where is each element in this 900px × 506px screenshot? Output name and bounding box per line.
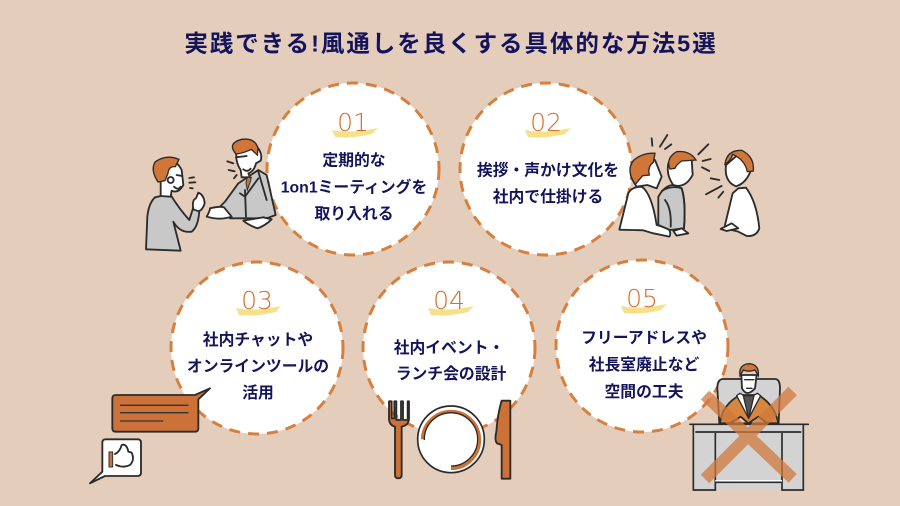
knife bbox=[495, 401, 510, 479]
highlight 04 bbox=[428, 306, 474, 316]
text 01: 取り入れる bbox=[314, 205, 394, 223]
text 04 bbox=[394, 339, 506, 383]
plate bbox=[418, 406, 484, 473]
fork bbox=[389, 401, 409, 478]
chat bubble bbox=[112, 388, 210, 432]
panel: method 02 bbox=[460, 83, 632, 255]
illustration: two businessmen talking bbox=[146, 139, 276, 251]
number 01: 01 bbox=[337, 108, 369, 137]
number 03: 03 bbox=[241, 286, 273, 315]
highlight 03 bbox=[236, 306, 281, 316]
highlight 01 bbox=[332, 128, 378, 138]
text 03: 活用 bbox=[242, 384, 274, 402]
highlight 02 bbox=[525, 128, 571, 138]
number 05: 05 bbox=[626, 284, 658, 313]
number 04: 04 bbox=[433, 286, 465, 315]
cross mark bbox=[705, 391, 793, 479]
text 01: 定期的な bbox=[322, 152, 386, 170]
left person bbox=[619, 153, 670, 237]
desk bbox=[690, 424, 808, 490]
right man bbox=[207, 139, 276, 228]
illustration: chat bubbles bbox=[90, 388, 210, 483]
text 05 bbox=[581, 329, 707, 401]
panel: method 05 bbox=[556, 260, 728, 432]
illustration: president at desk crossed out bbox=[690, 364, 808, 490]
title: 実践できる!風通しを良くする具体的な方法5選 bbox=[184, 30, 718, 56]
text 05: フリーアドレスや bbox=[581, 329, 707, 347]
text 04: 社内イベント・ bbox=[394, 339, 504, 357]
number 02: 02 bbox=[530, 108, 562, 137]
text 01: 1on1ミーティングを bbox=[281, 178, 427, 196]
panel: method 01 bbox=[267, 83, 439, 255]
thumbs-up bubble bbox=[90, 439, 141, 483]
chair bbox=[717, 379, 780, 423]
panel: method 04 bbox=[363, 262, 535, 434]
text 01 bbox=[281, 152, 427, 223]
text 05: 空間の工夫 bbox=[604, 382, 684, 401]
emphasis lines bbox=[652, 135, 723, 198]
illustration: three people greeting bbox=[619, 135, 759, 237]
illustration: fork, plate and knife bbox=[389, 401, 510, 479]
panel: method 03 bbox=[171, 262, 343, 434]
text 03: 社内チャットや bbox=[203, 331, 313, 349]
text 04: ランチ会の設計 bbox=[396, 365, 506, 383]
text 02: 社内で仕掛ける bbox=[493, 187, 603, 206]
text 03: オンラインツールの bbox=[187, 358, 329, 376]
highlight 05 bbox=[621, 304, 667, 314]
right person bbox=[721, 150, 759, 236]
text 03 bbox=[187, 331, 329, 402]
left man bbox=[146, 157, 205, 251]
middle person bbox=[658, 152, 696, 236]
text 05: 社長室廃止など bbox=[589, 356, 699, 374]
text 02: 挨拶・声かけ文化を bbox=[477, 162, 619, 180]
president bbox=[720, 364, 778, 423]
text 02 bbox=[477, 162, 619, 206]
